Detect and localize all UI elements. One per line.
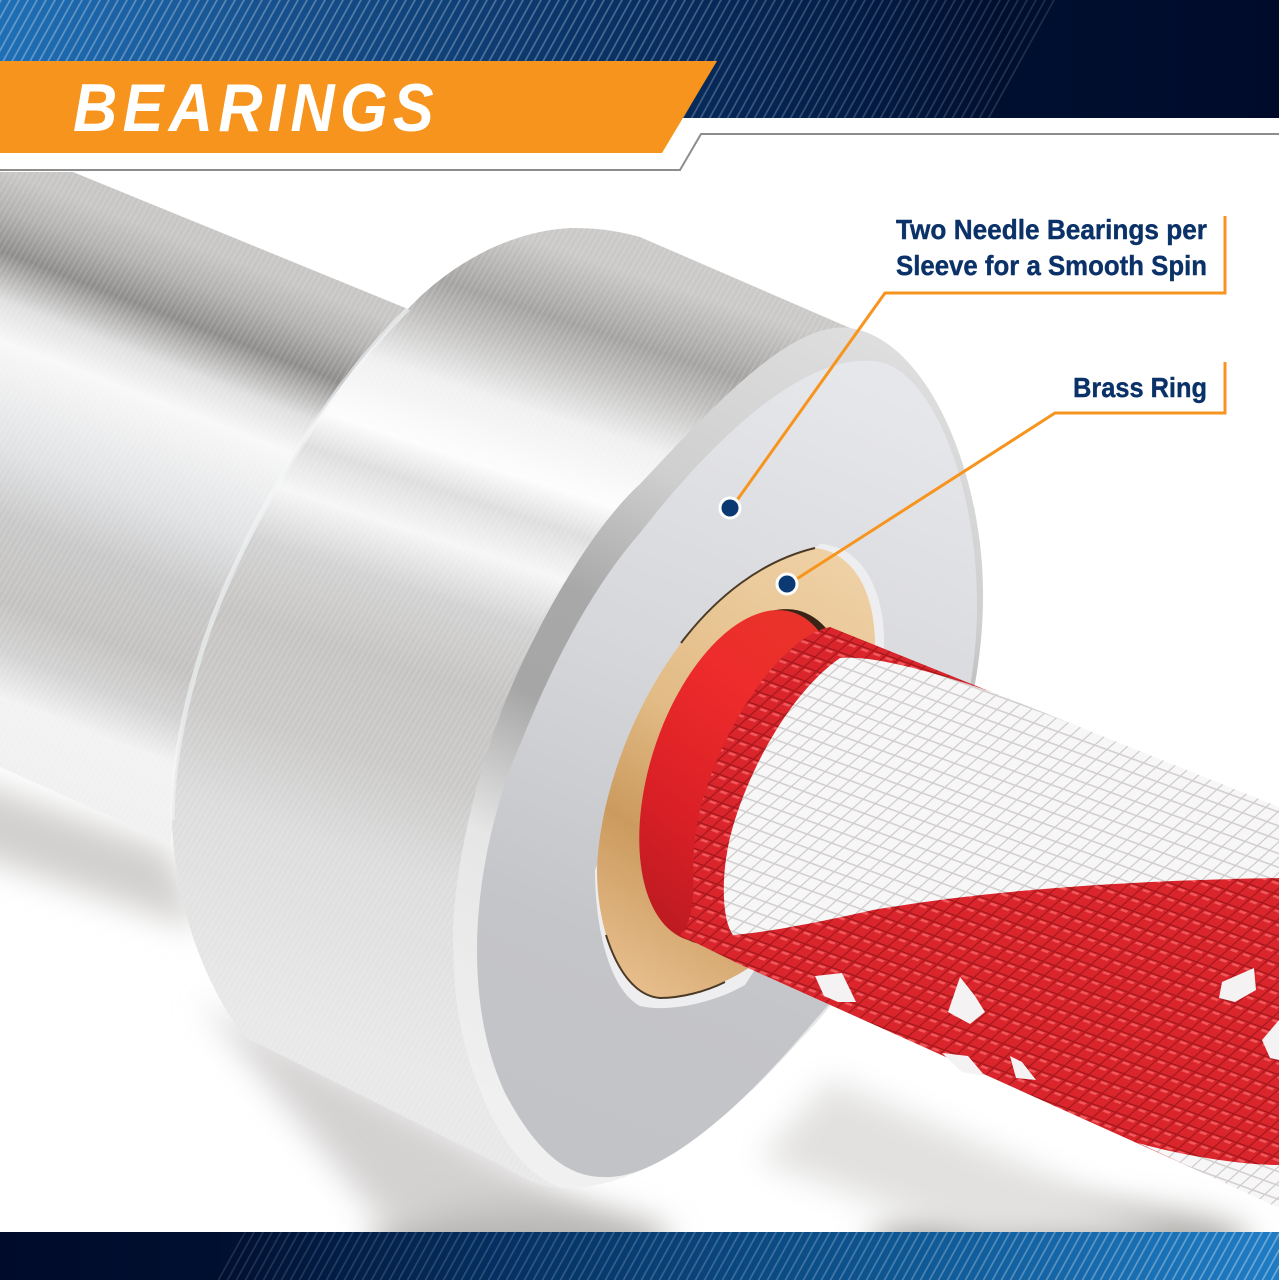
grey header rule — [0, 134, 1279, 170]
top banner band — [0, 0, 1279, 118]
leader line — [735, 216, 1225, 503]
marker dot — [720, 498, 740, 518]
outer chamfer — [453, 328, 983, 1188]
bottom band — [0, 1232, 1279, 1280]
sleeve end face — [453, 328, 983, 1188]
barbell shaft — [0, 172, 408, 843]
callout text: Sleeve for a Smooth Spin — [896, 250, 1207, 281]
white grip section — [724, 658, 1279, 935]
white notch under top band — [680, 118, 1279, 134]
white seat — [595, 544, 884, 1008]
knurled grip — [680, 627, 1279, 1208]
brass ring — [595, 544, 889, 1008]
marker dot — [777, 574, 797, 594]
ring body — [597, 548, 875, 998]
callout text: Two Needle Bearings per — [896, 214, 1207, 245]
flat face — [477, 361, 977, 1177]
ring shadow edges — [606, 548, 815, 998]
orange title banner — [0, 61, 717, 153]
lower white grip section — [1138, 1143, 1279, 1208]
leader line — [795, 362, 1225, 580]
callout: brass ring — [777, 362, 1225, 594]
callout: needle bearings — [720, 214, 1225, 518]
white grip specks — [815, 968, 1279, 1080]
inner hole — [688, 609, 826, 944]
floor shadow — [0, 775, 1250, 1278]
sleeve collar — [172, 228, 900, 1188]
red grip collar — [639, 610, 818, 942]
title: BEARINGS — [73, 69, 439, 146]
callout text: Brass Ring — [1073, 372, 1207, 403]
